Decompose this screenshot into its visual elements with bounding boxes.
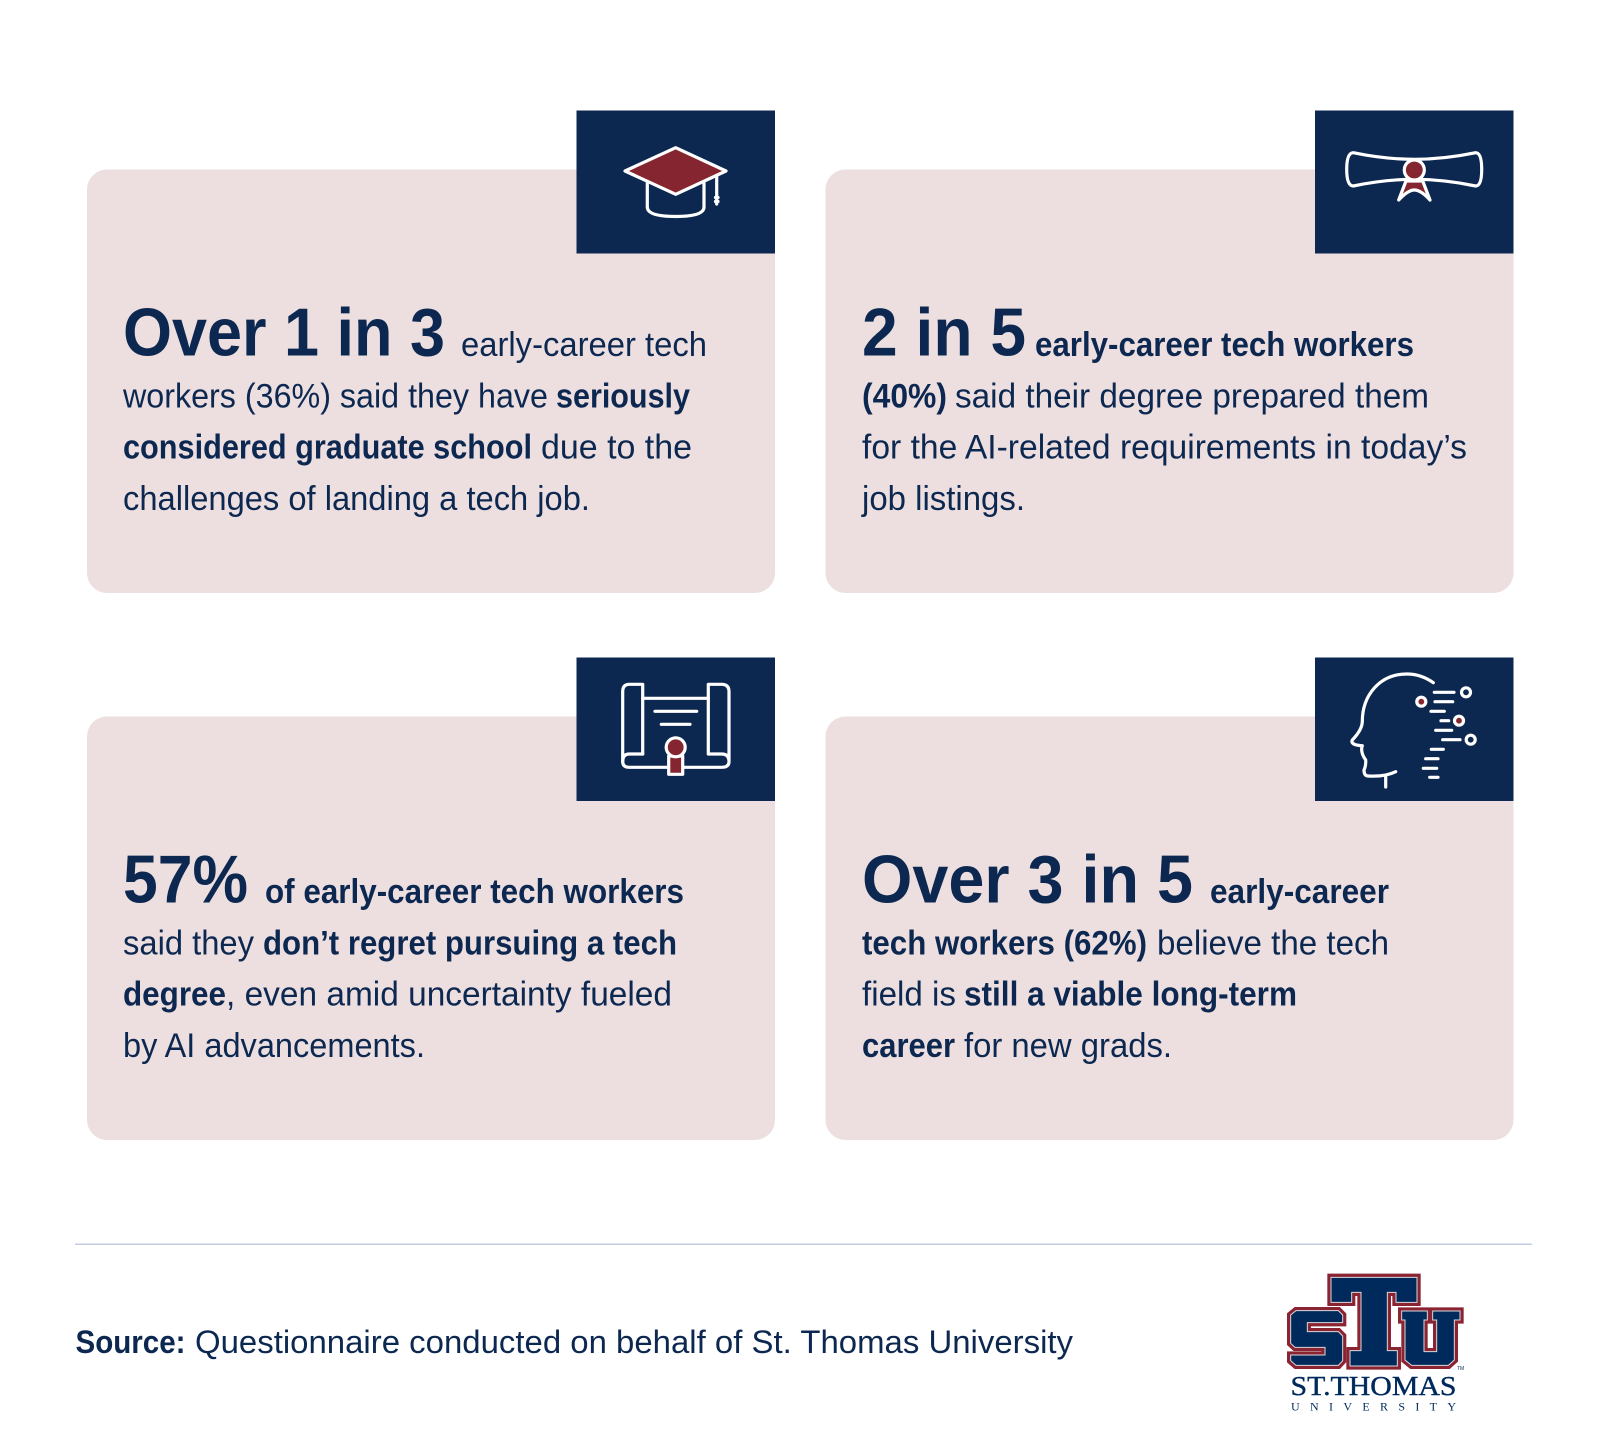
stat text: over 1 in 3: challenges of landing a tech job. <box>123 480 590 518</box>
stat text: over 1 in 3: seriously <box>556 378 690 416</box>
stat text: 57% <box>123 842 684 1065</box>
stat text: 2 in 5 <box>861 294 1467 518</box>
stat text: over 3 in 5: for new grads. <box>964 1027 1172 1065</box>
stat text: over 3 in 5 <box>862 842 1389 1065</box>
panel: graduate school <box>87 110 775 593</box>
card background <box>87 170 775 593</box>
stat text: 2 in 5: job listings. <box>861 480 1025 518</box>
stat text: 57%: of early-career tech workers <box>265 873 684 911</box>
logo wordmark <box>1290 1366 1464 1414</box>
stat text: 2 in 5: said their degree prepared them <box>955 378 1429 416</box>
card background <box>87 716 775 1140</box>
stat text: 57%: , even amid uncertainty fueled <box>226 976 672 1014</box>
stat text: over 3 in 5: field is <box>862 976 956 1014</box>
stat text: over 1 in 3: workers (36%) said they have <box>122 378 548 416</box>
stat text: 2 in 5: early-career tech workers <box>1035 326 1414 364</box>
logo: St. Thomas University <box>1290 1277 1464 1414</box>
icon: diploma scroll <box>1315 110 1514 254</box>
panel: degree preparation <box>826 110 1514 593</box>
panel: viable career <box>826 658 1514 1140</box>
stat text: over 3 in 5: still a viable long-term <box>964 976 1297 1014</box>
icon: AI head <box>1315 658 1514 801</box>
stat text: 57%: 57% <box>123 842 248 918</box>
logo wordmark: UNIVERSITY <box>1291 1400 1456 1414</box>
stat text: 2 in 5: for the AI-related requirements in today’s <box>862 428 1467 466</box>
stat text: over 3 in 5: Over 3 in 5 <box>862 842 1193 918</box>
stat text: over 1 in 3: considered graduate school <box>123 428 532 466</box>
source note: Source: <box>76 1324 186 1360</box>
stat text: over 1 in 3: due to the <box>541 428 692 466</box>
logo wordmark: TM <box>1457 1366 1464 1372</box>
panel: no regret <box>87 658 775 1140</box>
stat text: over 1 in 3: early-career tech <box>461 326 707 364</box>
card background <box>826 716 1514 1140</box>
stat text: 57%: by AI advancements. <box>123 1027 425 1065</box>
stat text: over 3 in 5: early-career <box>1210 873 1389 911</box>
stat text: 57%: degree <box>123 976 226 1014</box>
stat text: over 3 in 5: tech workers (62%) <box>862 924 1147 962</box>
logo wordmark: ST.THOMAS <box>1290 1371 1456 1401</box>
icon: graduation cap <box>576 110 775 254</box>
stat text: over 1 in 3 <box>122 294 707 518</box>
stat text: 2 in 5: 2 in 5 <box>862 294 1026 370</box>
source note: Questionnaire conducted on behalf of St. Thomas University <box>195 1324 1073 1360</box>
stat text: over 1 in 3: Over 1 in 3 <box>123 294 445 370</box>
stat text: 57%: said they <box>123 924 254 962</box>
stat text: 57%: don’t regret pursuing a tech <box>263 924 677 962</box>
stat text: 2 in 5: (40%) <box>862 378 947 416</box>
card background <box>826 170 1514 593</box>
icon: certificate with seal <box>576 658 775 801</box>
stat text: over 3 in 5: career <box>862 1027 955 1065</box>
stat text: over 3 in 5: believe the tech <box>1157 924 1389 962</box>
logo mark: STU letters <box>1291 1277 1460 1366</box>
